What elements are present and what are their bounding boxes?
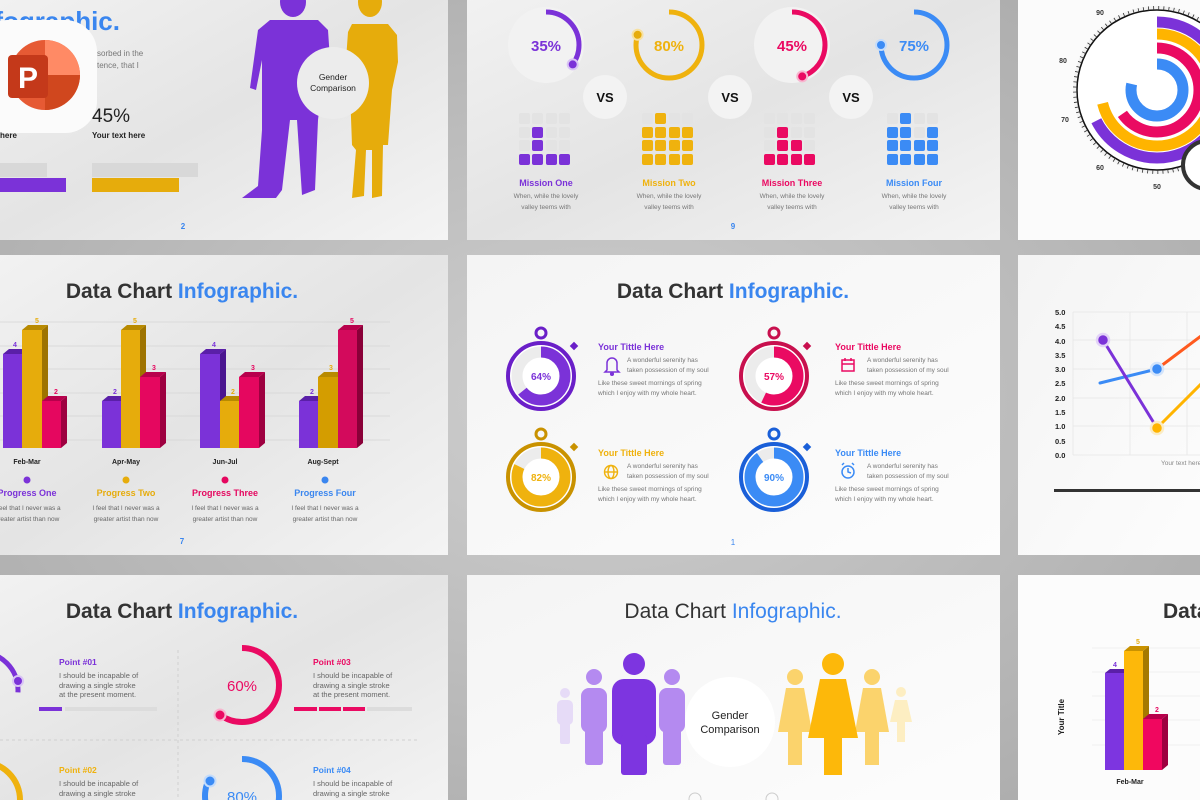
text block 3: taken possession of my soul bbox=[627, 473, 709, 480]
stopwatch 57%: 57% bbox=[764, 372, 784, 383]
slide: bottom-right 3D bars bbox=[1018, 575, 1200, 800]
stopwatch 82%: 82% bbox=[531, 473, 551, 484]
slide: center stopwatches bbox=[467, 255, 1000, 555]
donut 80%: 80% bbox=[654, 38, 684, 55]
legend: Progress Three bbox=[192, 488, 258, 498]
grid: mission two bbox=[642, 113, 693, 165]
point 04 text: Point #04 bbox=[313, 765, 351, 775]
mission labels: Mission Four bbox=[886, 178, 942, 188]
gauge dial bbox=[1059, 6, 1200, 191]
mission labels: When, while the lovely bbox=[882, 193, 947, 200]
gauge dial: 80 bbox=[1059, 58, 1067, 65]
mission labels: Mission Three bbox=[762, 178, 822, 188]
point 02 text: Point #02 bbox=[59, 765, 97, 775]
slide: bottom-left point rings bbox=[0, 575, 448, 800]
bar chart bbox=[3, 318, 363, 448]
y-axis labels: 5.0 bbox=[1055, 308, 1065, 317]
ring: 80% bbox=[204, 759, 279, 800]
stopwatch 57% bbox=[741, 328, 811, 409]
point 02 text: I should be incapable of bbox=[59, 779, 139, 788]
text block 1: taken possession of my soul bbox=[627, 367, 709, 374]
donut 75% bbox=[876, 12, 947, 78]
mission labels: valley teems with bbox=[889, 204, 939, 211]
gauge dial: 70 bbox=[1061, 117, 1069, 124]
text block 4: Like these sweet mornings of spring bbox=[835, 486, 939, 493]
donut 35% bbox=[508, 7, 584, 83]
icon: calendar bbox=[842, 358, 854, 371]
point 04 text: drawing a single stroke bbox=[313, 789, 390, 798]
point 03 text: Point #03 bbox=[313, 657, 351, 667]
point 03 text bbox=[313, 657, 393, 699]
y-axis labels: 3.5 bbox=[1055, 351, 1065, 360]
mission labels: valley teems with bbox=[521, 204, 571, 211]
callout: gender comparison: Comparison bbox=[700, 724, 760, 736]
icon: purple men group bbox=[557, 653, 685, 775]
text block 3 bbox=[597, 448, 709, 503]
donut 75%: 75% bbox=[899, 38, 929, 55]
x-axis label: Feb-Mar bbox=[1116, 779, 1144, 786]
vs badges bbox=[583, 75, 873, 119]
stat 45%: here bbox=[0, 131, 17, 140]
donut 35%: 35% bbox=[531, 38, 561, 55]
line chart series bbox=[1097, 333, 1200, 434]
legend: Progress Two bbox=[97, 488, 156, 498]
ring: 60% bbox=[205, 648, 279, 722]
bar chart: 2 bbox=[231, 389, 235, 396]
text block 4: taken possession of my soul bbox=[867, 473, 949, 480]
text block 4: A wonderful serenity has bbox=[867, 463, 939, 470]
legend: I feel that I never was a bbox=[92, 505, 160, 512]
legend: greater artist than now bbox=[94, 516, 159, 523]
point 04 text: I should be incapable of bbox=[313, 779, 393, 788]
x-axis labels: Feb-Mar bbox=[13, 459, 41, 466]
stopwatch 90%: 90% bbox=[764, 473, 784, 484]
bar chart: 4 bbox=[212, 342, 216, 349]
icon: globe bbox=[604, 466, 618, 478]
text block 2 bbox=[834, 342, 949, 397]
text block 1 bbox=[597, 342, 709, 397]
icon: alarm clock bbox=[842, 463, 854, 478]
bar chart: 5 bbox=[35, 318, 39, 325]
grid lines bbox=[0, 322, 390, 440]
text block 2: Your Tittle Here bbox=[835, 342, 901, 352]
point 03 text: at the present moment. bbox=[313, 690, 390, 699]
mission labels: When, while the lovely bbox=[760, 193, 825, 200]
callout: gender comparison circle bbox=[297, 47, 369, 119]
point 01 text: at the present moment. bbox=[59, 690, 136, 699]
callout: gender comparison bbox=[685, 677, 775, 767]
body text fragment: tence, that I bbox=[97, 61, 139, 70]
slide: middle-left 3D bar chart bbox=[0, 255, 448, 555]
vs badges: VS bbox=[842, 90, 860, 105]
x-axis labels: Apr-May bbox=[112, 459, 140, 466]
title: Data Chart Infographic. bbox=[617, 280, 849, 303]
point 03 text: I should be incapable of bbox=[313, 671, 393, 680]
bar chart bbox=[1105, 639, 1168, 770]
radial bars bbox=[1089, 22, 1200, 158]
point 01 text: Point #01 bbox=[59, 657, 97, 667]
stat 45%: Your text here bbox=[92, 131, 146, 140]
callout circle bbox=[1183, 141, 1200, 189]
slide: top-middle mission comparison bbox=[467, 0, 1000, 240]
title: Data Chart Infographic. bbox=[66, 600, 298, 623]
bar chart: 2 bbox=[113, 389, 117, 396]
ring: yellow partial bbox=[0, 762, 20, 800]
page number: 7 bbox=[180, 537, 185, 546]
y-axis labels: 0.0 bbox=[1055, 451, 1065, 460]
bar chart: 2 bbox=[310, 389, 314, 396]
bar chart: 5 bbox=[350, 318, 354, 325]
gauge dial: 50 bbox=[1153, 184, 1161, 191]
donut 45% bbox=[754, 7, 830, 83]
mission labels: valley teems with bbox=[767, 204, 817, 211]
slide: top-right radial chart bbox=[1018, 0, 1200, 240]
slide: top-left gender comparison bbox=[0, 0, 448, 240]
bar chart: 3 bbox=[152, 365, 156, 372]
stopwatch 82% bbox=[508, 429, 578, 510]
stopwatch 90% bbox=[741, 429, 811, 510]
point 03 text: drawing a single stroke bbox=[313, 681, 390, 690]
text block 2: taken possession of my soul bbox=[867, 367, 949, 374]
y-axis labels: 4.0 bbox=[1055, 337, 1065, 346]
text block 1: Your Tittle Here bbox=[598, 342, 664, 352]
icon: yellow women group bbox=[778, 653, 912, 775]
bar chart: 4 bbox=[13, 342, 17, 349]
slide: bottom-middle people bbox=[467, 575, 1000, 800]
y-axis labels: 1.0 bbox=[1055, 422, 1065, 431]
title: Data Chart Infographic. bbox=[624, 600, 842, 623]
text block 2: which I enjoy with my whole heart. bbox=[834, 390, 934, 397]
point 01 text bbox=[59, 657, 139, 699]
bar chart: 3 bbox=[251, 365, 255, 372]
callout: gender comparison: Gender bbox=[712, 710, 749, 722]
stopwatch 64%: 64% bbox=[531, 372, 551, 383]
body text fragment bbox=[97, 49, 144, 70]
text block 2: Like these sweet mornings of spring bbox=[835, 380, 939, 387]
gauge dial: 60 bbox=[1096, 165, 1104, 172]
progress bar 01 bbox=[39, 707, 157, 711]
point 01 text: drawing a single stroke bbox=[59, 681, 136, 690]
text block 4: which I enjoy with my whole heart. bbox=[834, 496, 934, 503]
title: Data Chart Infographic. bbox=[66, 280, 298, 303]
text block 3: Your Tittle Here bbox=[598, 448, 664, 458]
progress bar 03 bbox=[294, 707, 412, 711]
ring: purple partial bbox=[0, 652, 23, 728]
x-axis labels: Jun-Jul bbox=[213, 459, 237, 466]
stopwatch 64% bbox=[508, 328, 578, 409]
donut 45%: 45% bbox=[777, 38, 807, 55]
legend: Progress Four bbox=[294, 488, 356, 498]
callout: gender comparison circle: Comparison bbox=[310, 83, 356, 93]
point 04 text bbox=[313, 765, 393, 798]
slide: middle-right line chart bbox=[1018, 255, 1200, 555]
bar chart: 3 bbox=[329, 365, 333, 372]
bar chart: 2 bbox=[54, 389, 58, 396]
text block 3: Like these sweet mornings of spring bbox=[598, 486, 702, 493]
grid: mission three bbox=[764, 113, 815, 165]
point 01 text: I should be incapable of bbox=[59, 671, 139, 680]
grid: mission one bbox=[519, 113, 570, 165]
vs badges: VS bbox=[596, 90, 614, 105]
mission labels: Mission Two bbox=[642, 178, 696, 188]
text block 2: A wonderful serenity has bbox=[867, 357, 939, 364]
y-axis labels bbox=[1055, 308, 1065, 460]
body text fragment: sorbed in the bbox=[97, 49, 144, 58]
stat 45% bbox=[0, 106, 146, 140]
ring: 60%: 60% bbox=[227, 678, 257, 695]
mission labels: When, while the lovely bbox=[637, 193, 702, 200]
text block 4: Your Tittle Here bbox=[835, 448, 901, 458]
page number: 1 bbox=[731, 538, 736, 547]
page number: 9 bbox=[731, 222, 736, 231]
y-axis labels: 2.0 bbox=[1055, 394, 1065, 403]
legend bbox=[0, 476, 359, 523]
vs badges: VS bbox=[721, 90, 739, 105]
x-axis labels: Aug-Sept bbox=[307, 459, 339, 466]
y-axis labels: 3.0 bbox=[1055, 365, 1065, 374]
bar chart: 5 bbox=[133, 318, 137, 325]
progress bars bbox=[0, 163, 198, 192]
icon: bell bbox=[605, 358, 619, 375]
y-axis labels: 0.5 bbox=[1055, 437, 1065, 446]
text block 1: A wonderful serenity has bbox=[627, 357, 699, 364]
legend: I feel that I never was a bbox=[291, 505, 359, 512]
stat 45%: 45% bbox=[92, 106, 130, 127]
icon: man silhouette bbox=[242, 0, 332, 198]
grid: mission four bbox=[887, 113, 938, 165]
legend: greater artist than now bbox=[293, 516, 358, 523]
mission labels: Mission One bbox=[519, 178, 573, 188]
point 02 text bbox=[59, 765, 139, 798]
axis label: Your Title bbox=[1057, 698, 1066, 735]
icon: powerpoint app bbox=[0, 20, 97, 133]
icon: powerpoint app: P bbox=[18, 62, 38, 95]
icon: woman silhouette bbox=[346, 0, 398, 198]
bar chart: 5 bbox=[1136, 639, 1140, 646]
text block 4 bbox=[834, 448, 949, 503]
y-axis labels: 2.5 bbox=[1055, 379, 1065, 388]
legend: greater artist than now bbox=[193, 516, 258, 523]
text block 3: A wonderful serenity has bbox=[627, 463, 699, 470]
text block 3: which I enjoy with my whole heart. bbox=[597, 496, 697, 503]
legend: I feel that I never was a bbox=[191, 505, 259, 512]
gauge dial: 90 bbox=[1096, 10, 1104, 17]
y-axis labels: 4.5 bbox=[1055, 322, 1065, 331]
mission labels: When, while the lovely bbox=[514, 193, 579, 200]
bar chart: 4 bbox=[1113, 662, 1117, 669]
y-axis labels: 1.5 bbox=[1055, 408, 1065, 417]
bar chart: 2 bbox=[1155, 707, 1159, 714]
mission labels: valley teems with bbox=[644, 204, 694, 211]
x-axis labels bbox=[13, 459, 339, 466]
callout: gender comparison circle: Gender bbox=[319, 72, 347, 82]
point 02 text: drawing a single stroke bbox=[59, 789, 136, 798]
text block 1: which I enjoy with my whole heart. bbox=[597, 390, 697, 397]
mission labels bbox=[514, 178, 947, 211]
donut 80% bbox=[633, 12, 702, 78]
page number: 2 bbox=[181, 222, 186, 231]
text block 1: Like these sweet mornings of spring bbox=[598, 380, 702, 387]
